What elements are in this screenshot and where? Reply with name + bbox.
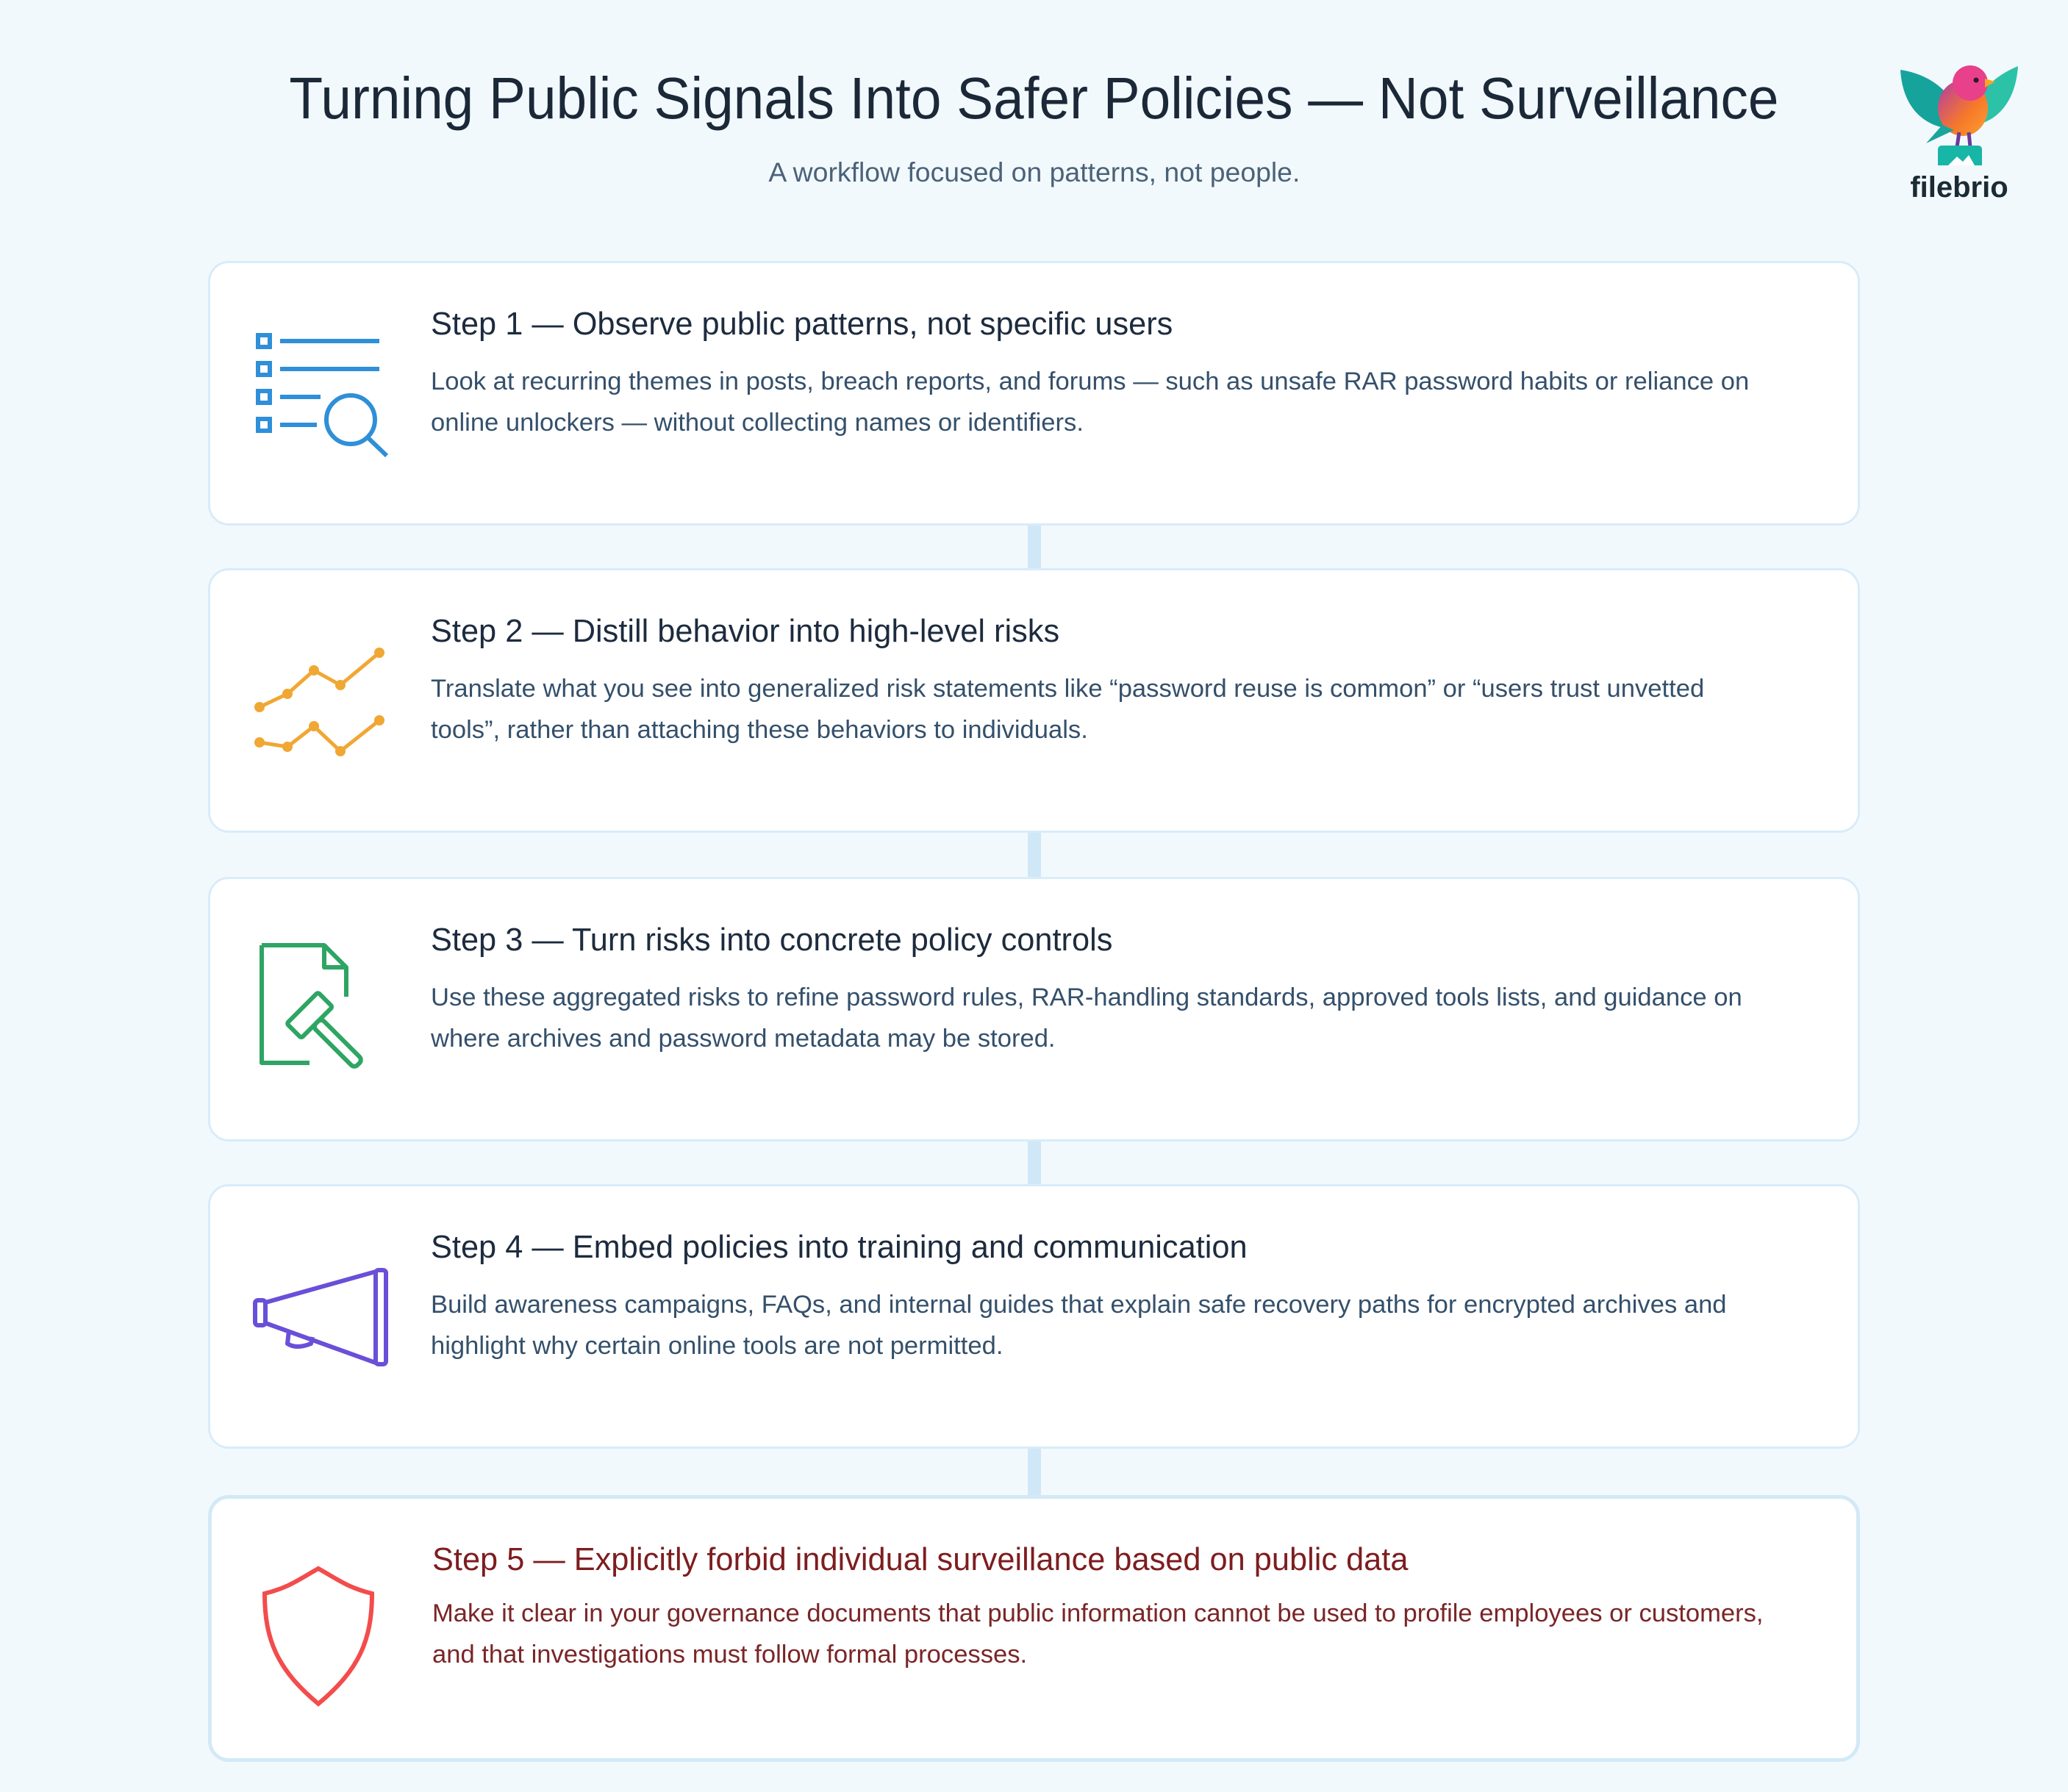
body: tools”, rather than attaching these behaviors to individuals. [431,716,1088,744]
body: Build awareness campaigns, FAQs, and internal guides that explain safe recovery paths for encrypted archives and [431,1291,1727,1319]
body: highlight why certain online tools are not permitted. [431,1332,1003,1360]
body: Make it clear in your governance documents that public information cannot be used to profile employees or customers, [432,1599,1764,1627]
connectors [1028,525,1041,569]
heading: Step 1 — Observe public patterns, not specific users [431,306,1173,342]
icon: trend lines [254,648,384,756]
heading: Step 3 — Turn risks into concrete policy controls [431,922,1112,958]
panel: step 5 [208,1495,1860,1762]
body: Use these aggregated risks to refine password rules, RAR-handling standards, approved tools lists, and guidance on [431,983,1742,1011]
panel: step 4 [208,1184,1860,1449]
icon: list search [256,333,388,457]
body [432,1599,1764,1669]
body: where archives and password metadata may be stored. [431,1025,1056,1053]
logo [1900,65,2018,204]
logo: filebrio [1910,171,2008,204]
panel: step 2 [208,568,1860,833]
heading: Step 5 — Explicitly forbid individual surveillance based on public data [432,1541,1408,1577]
body: Look at recurring themes in posts, breach reports, and forums — such as unsafe RAR password habits or reliance on [431,368,1749,395]
panel: step 1 [208,261,1860,526]
icon: document gavel [260,943,363,1069]
heading: Step 4 — Embed policies into training and communication [431,1229,1248,1265]
body: online unlockers — without collecting names or identifiers. [431,409,1084,437]
body: and that investigations must follow formal processes. [432,1641,1027,1669]
body [431,1291,1727,1360]
icon: megaphone [253,1268,388,1366]
subtitle: A workflow focused on patterns, not people. [768,157,1300,187]
body [431,983,1742,1053]
body [431,368,1749,437]
panel: step 3 [208,877,1860,1141]
body: Translate what you see into generalized risk statements like “password reuse is common” or “users trust unvetted [431,675,1704,703]
body [431,675,1704,744]
title: Turning Public Signals Into Safer Policies — Not Surveillance [289,65,1779,131]
heading: Step 2 — Distill behavior into high-level risks [431,613,1059,649]
icon: shield [262,1566,374,1707]
